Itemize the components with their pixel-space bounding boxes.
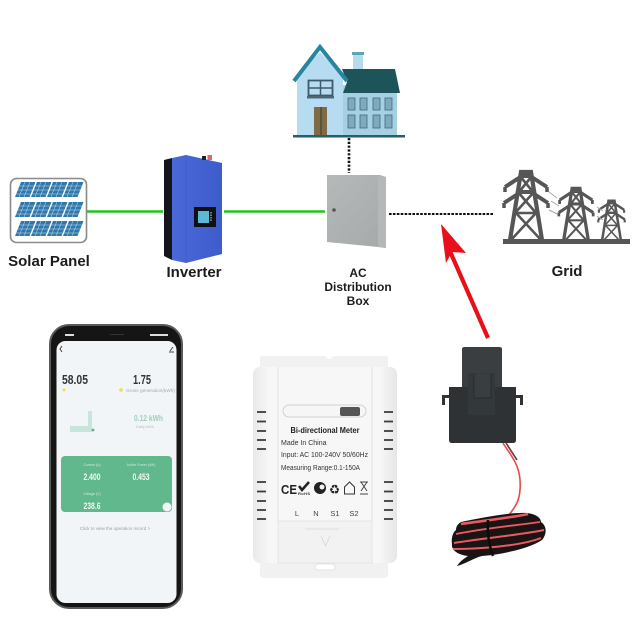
red arrow <box>441 224 488 338</box>
app readings: 58.05 <box>62 372 88 387</box>
meter terminal labels <box>295 509 359 518</box>
meter label text: Input: AC 100-240V 50/60Hz <box>281 452 368 459</box>
app mini chart <box>70 411 94 432</box>
inverter <box>164 155 222 263</box>
inverter label: Inverter <box>166 264 222 281</box>
app green card <box>61 456 172 512</box>
phone with app <box>50 325 182 608</box>
meter certification marks: CE <box>281 482 297 497</box>
AC distribution box label: Distribution <box>324 280 392 294</box>
meter terminal labels: L <box>295 509 299 518</box>
meter label text: Made In China <box>281 440 327 447</box>
current clamp sensor <box>442 347 546 566</box>
connection: inverter to distribution box <box>224 210 325 213</box>
app green card: Voltage (V) <box>83 492 101 496</box>
app header <box>60 346 174 352</box>
app green card: Active Power (kW) <box>127 463 155 467</box>
AC distribution box <box>327 175 386 248</box>
meter terminal labels: S1 <box>330 509 340 518</box>
meter terminal labels: S2 <box>349 509 359 518</box>
app readings <box>62 372 176 429</box>
meter certification marks: RoHS <box>298 491 310 496</box>
app green card: Current (A) <box>83 463 101 467</box>
solar panel label: Solar Panel <box>8 253 90 270</box>
house icon <box>293 47 405 138</box>
sensor cable <box>452 443 546 566</box>
meter terminal cover <box>278 521 372 563</box>
app status bar <box>65 334 168 336</box>
grid pylons icon <box>503 172 630 244</box>
meter label text <box>281 426 368 472</box>
connection: distribution box to grid <box>389 213 493 215</box>
app green card: 238.6 <box>84 501 100 511</box>
app readings: Daily kWh <box>136 424 154 429</box>
app readings: 1.75 <box>133 372 151 387</box>
app green card: 2.400 <box>84 472 100 482</box>
app readings: 0.12 kWh <box>134 413 163 423</box>
meter mounting hole <box>315 564 335 570</box>
meter certification marks: ♻ <box>329 482 340 497</box>
bi-directional meter <box>253 356 397 578</box>
app green card: 0.453 <box>132 472 150 482</box>
meter certification marks <box>281 482 368 497</box>
grid label: Grid <box>552 263 582 280</box>
connection: house to distribution box <box>348 138 350 173</box>
solar panel icon <box>10 178 86 242</box>
AC distribution box label: AC <box>349 266 367 280</box>
connection: solar panel to inverter <box>87 210 163 213</box>
AC distribution box label: Box <box>347 294 370 308</box>
meter label text: Measuring Range:0.1-150A <box>281 465 360 472</box>
meter terminal labels: N <box>313 509 319 518</box>
app readings: Gross generation(kWh) <box>126 388 176 393</box>
meter label text: Bi-directional Meter <box>290 426 360 435</box>
app link text: Click to view the operation record > <box>80 526 151 531</box>
